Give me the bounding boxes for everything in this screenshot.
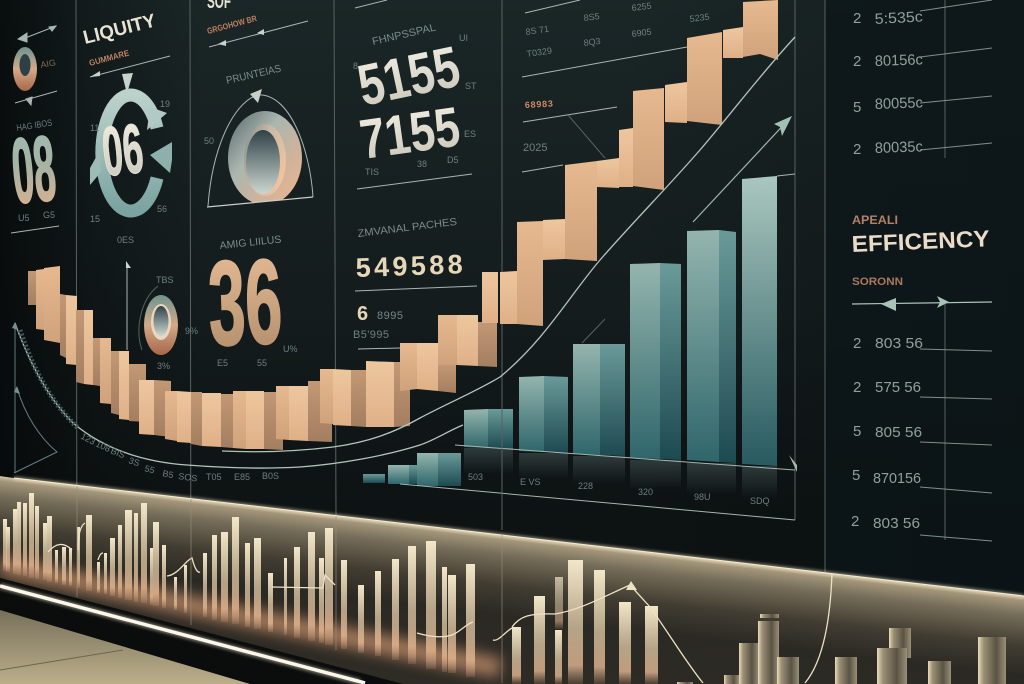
- axis labels: 503: [468, 472, 483, 482]
- small figures: B5'995: [353, 329, 389, 341]
- list rows lower: 575 56: [875, 379, 921, 396]
- arrow: upper-right trend: [693, 116, 792, 222]
- list rows lower: 5: [853, 423, 861, 440]
- list rows lower: 2: [851, 513, 859, 530]
- panel: principal: [352, 0, 477, 349]
- small values: [217, 344, 298, 368]
- list rows lower: 2: [853, 379, 861, 396]
- curve tick labels: B0S: [262, 471, 279, 481]
- lower donut labels: 3%: [157, 361, 170, 371]
- underline: [355, 286, 477, 291]
- curve tick labels: 55: [143, 463, 156, 476]
- axis labels: SDQ: [750, 496, 770, 506]
- list rows upper: 80055c: [875, 94, 924, 113]
- small values: G5: [43, 210, 55, 220]
- trend curves: [15, 37, 795, 468]
- tick labels: TIS: [365, 167, 379, 177]
- label: FHNPSSPAL: [371, 22, 437, 48]
- band dividers: [77, 486, 502, 683]
- gauge tick labels: 56: [157, 204, 167, 214]
- metric label: AMIG LIILUS: [219, 234, 282, 252]
- tick labels: [353, 33, 477, 177]
- left arrows: [15, 26, 57, 105]
- tick labels: 38: [417, 159, 427, 169]
- tick labels: ST: [465, 81, 477, 91]
- big number row two: 7155: [356, 95, 464, 171]
- list rows lower: 803 56: [875, 335, 923, 352]
- table values: 8Q3: [583, 36, 601, 48]
- axis labels: E VS: [520, 477, 541, 487]
- small donut label: AIG: [40, 57, 57, 70]
- label: ZMVANAL PACHES: [357, 216, 458, 240]
- vertical arrow: [126, 261, 131, 350]
- tick labels: UI: [459, 33, 468, 43]
- tick labels: D5: [447, 155, 459, 165]
- left curve arrows: [12, 322, 78, 473]
- small figures: 6: [357, 303, 368, 325]
- gauge tick labels: 15: [90, 214, 100, 224]
- small values: U%: [283, 344, 298, 354]
- gauge value 06: 06: [98, 109, 147, 191]
- list rows upper: 2: [853, 141, 861, 158]
- bar chart: glowing right bars: [677, 614, 1006, 684]
- LED strip: [0, 586, 365, 683]
- axis labels: [468, 472, 770, 506]
- list rows lower: 803 56: [873, 515, 920, 532]
- heading: efficiency: EFFICENCY: [851, 225, 990, 257]
- small values: U5: [18, 213, 30, 223]
- curve tick labels: 3S: [127, 455, 141, 468]
- table values: 8S 71: [525, 24, 550, 37]
- gauge tick label: 50: [204, 136, 214, 146]
- lower donut labels: 9%: [185, 326, 198, 336]
- list rows lower: 805 56: [875, 424, 922, 441]
- icon: donut gauge: [207, 89, 313, 207]
- list rows upper: 2: [853, 10, 861, 27]
- double arrow: [852, 296, 992, 311]
- small values: [18, 210, 55, 223]
- list rows lower: 870156: [873, 470, 921, 487]
- sub-heading: GRGOHOW BR: [206, 13, 258, 36]
- gauge tick labels: [90, 99, 170, 245]
- curve tick labels: [79, 431, 279, 484]
- tick labels: ES: [464, 129, 476, 139]
- gauge tick labels: 11: [90, 123, 99, 133]
- curve tick labels: 108: [94, 439, 112, 454]
- list rows upper: 5:535c: [874, 8, 924, 28]
- list rows upper: 80035c: [875, 138, 924, 157]
- band edge glow: [14, 478, 1024, 596]
- icon: small donut: [13, 47, 37, 91]
- big number 36: 36: [206, 233, 284, 371]
- number row: 549588: [355, 249, 464, 283]
- curve tick labels: BIS: [109, 446, 126, 460]
- chart: peach stepped curve: [28, 0, 778, 450]
- list rows upper: 2: [853, 53, 861, 70]
- base plinth and floor: [0, 570, 420, 684]
- panel: liquidity: [81, 10, 198, 371]
- small figures: [353, 303, 403, 341]
- table values: 6905: [631, 27, 652, 39]
- table values: 5235: [689, 12, 710, 24]
- underline: [11, 226, 59, 233]
- lit lower band: [0, 476, 1024, 684]
- gauge tick labels: 0ES: [117, 235, 134, 245]
- icon: lower donut: [139, 286, 178, 355]
- panel: centre-left: [204, 0, 313, 371]
- heading: liquidity: LIQUITY: [81, 10, 158, 49]
- eyebrow: APEALI: [852, 213, 898, 227]
- curve tick labels: T05: [206, 472, 222, 482]
- panel dividers: [76, 0, 945, 625]
- highlighted value: 68983: [525, 99, 553, 110]
- list rows lower: 2: [853, 335, 861, 352]
- table values: [525, 1, 710, 59]
- panel: far-left metric: [8, 26, 60, 233]
- arrowhead on band trend line: [626, 581, 637, 590]
- small values: E5: [217, 358, 228, 368]
- axis labels: 98U: [694, 492, 711, 502]
- big number row one: 5155: [352, 34, 465, 119]
- sub-heading: GUMMARE: [88, 48, 130, 68]
- sub-heading arrows: [209, 21, 308, 47]
- thin accent line: [582, 319, 605, 343]
- gauge tick labels: 19: [160, 99, 170, 109]
- panel: upper chart data: [522, 0, 710, 172]
- year label: 2025: [523, 142, 547, 154]
- bar chart: teal rising bars: [363, 174, 797, 520]
- underline: [357, 174, 472, 189]
- bar chart: glowing left bars: [3, 493, 658, 684]
- panel: right efficiency list: [851, 0, 992, 541]
- list rows lower: 5: [852, 467, 860, 484]
- list rows lower: [851, 335, 992, 541]
- tick labels: 8: [353, 61, 358, 71]
- curve tick labels: E85: [234, 472, 250, 482]
- table values: 6255: [631, 1, 652, 13]
- chart baselines: [400, 174, 795, 520]
- metric label: HAG IBOS: [16, 117, 53, 133]
- axis labels: 320: [638, 487, 653, 497]
- band trend lines: [48, 523, 832, 683]
- big number 08: 08: [8, 116, 60, 222]
- sub-heading: SORONN: [852, 276, 903, 288]
- lower donut labels: TBS: [156, 275, 174, 285]
- small values: 55: [257, 358, 267, 368]
- small figures: 8995: [377, 310, 403, 322]
- lower donut labels: [156, 275, 198, 371]
- list rows upper: 5: [853, 99, 861, 116]
- list rows upper: 80156c: [875, 51, 924, 70]
- curve tick labels: B5: [162, 468, 174, 480]
- list rows upper: [853, 0, 992, 158]
- sub-heading arrow: [90, 56, 170, 77]
- axis labels: 228: [578, 481, 593, 491]
- gauge label: PRUNTEIAS: [225, 63, 282, 87]
- table values: 8S5: [583, 11, 600, 23]
- curve tick labels: SOS: [178, 471, 198, 484]
- icon: circular gauge with arrows: [90, 73, 172, 211]
- bar reflections: [464, 448, 777, 499]
- table values: T0329: [526, 46, 553, 59]
- curve tick labels: 123: [79, 431, 97, 447]
